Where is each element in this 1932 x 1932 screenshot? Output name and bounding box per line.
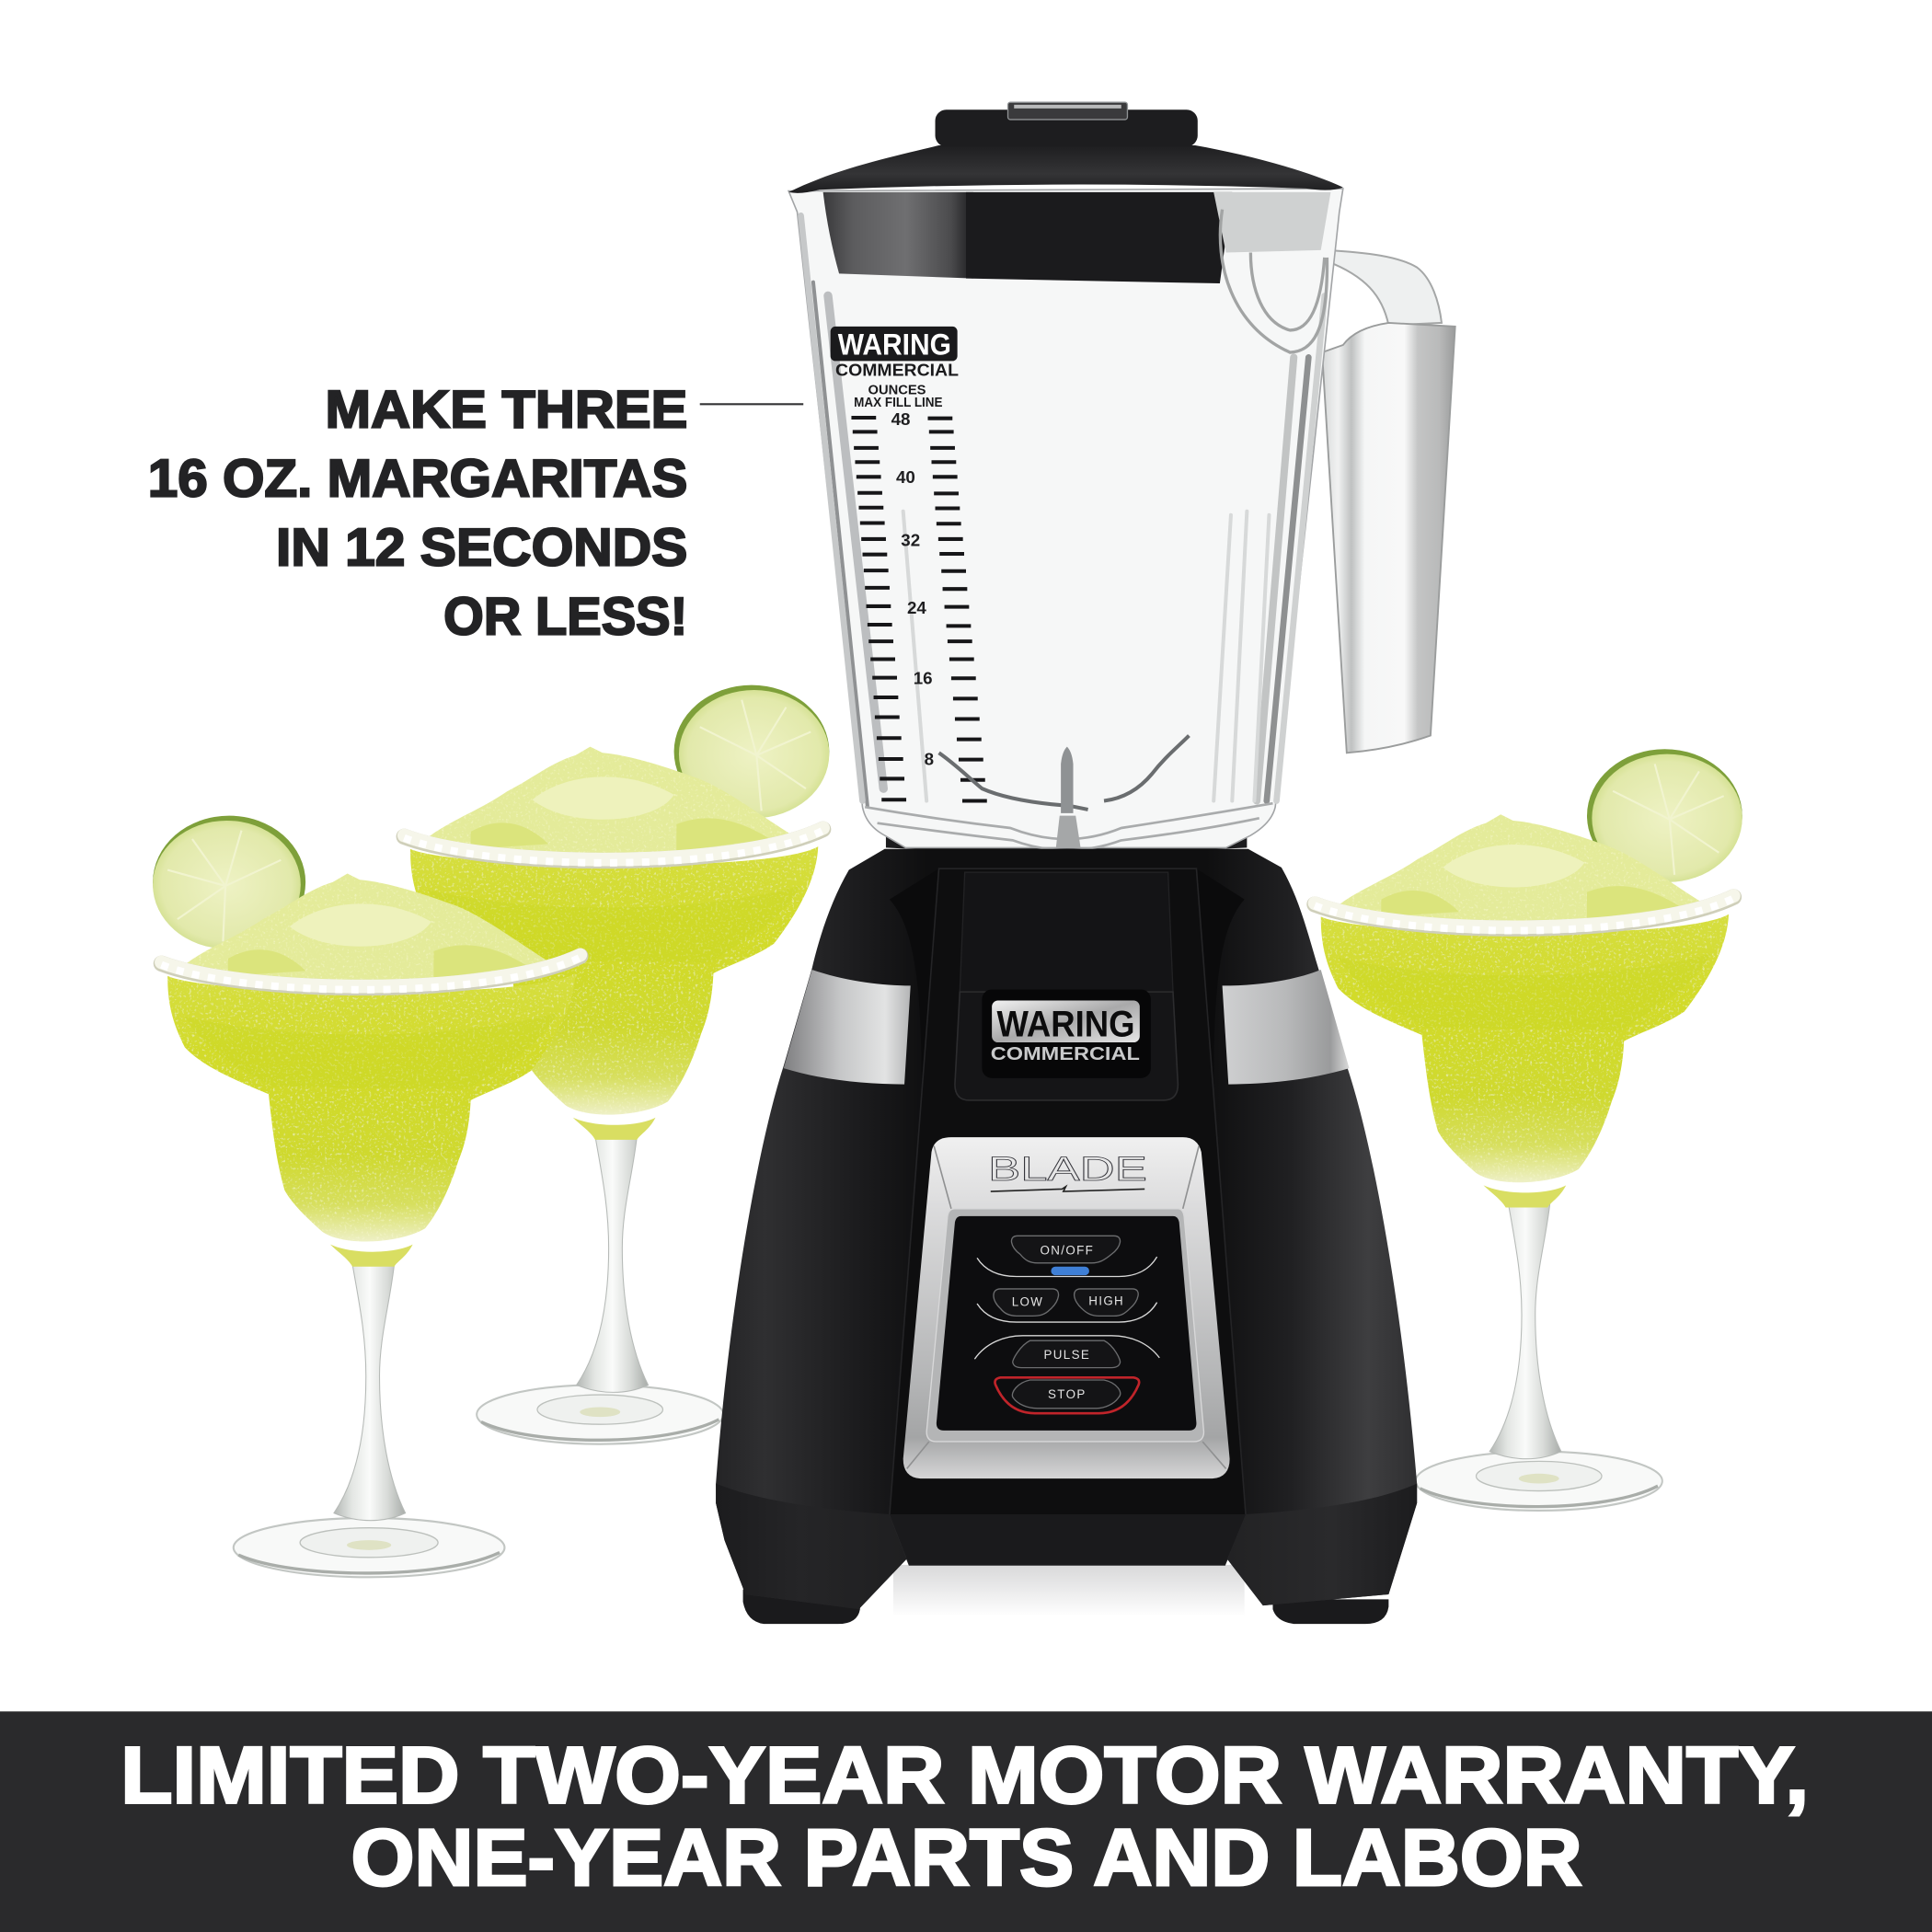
ounce numbers: 16 — [914, 668, 933, 687]
jar logo: WARING — [838, 328, 951, 362]
ounce numbers: 32 — [901, 530, 920, 549]
warranty banner — [0, 1711, 1932, 1932]
ounce numbers: 24 — [907, 598, 926, 617]
rubber feet — [743, 1590, 1388, 1624]
base lower band — [716, 1483, 1417, 1609]
shoulder shading — [890, 868, 1245, 1085]
blade — [939, 736, 1189, 847]
base logo plaque: WARING — [996, 1003, 1134, 1044]
right silver band — [1223, 970, 1350, 1085]
base logo plaque: COMMERCIAL — [991, 1043, 1140, 1064]
upper recess — [960, 872, 1173, 992]
jar logo: COMMERCIAL — [835, 360, 959, 379]
power LED — [1051, 1267, 1089, 1275]
button labels: HIGH — [1088, 1294, 1124, 1307]
button outlines — [994, 1236, 1138, 1409]
callout text: margaritas: IN 12 SECONDS — [276, 519, 687, 578]
callout text: margaritas — [148, 381, 687, 647]
button labels: STOP — [1048, 1387, 1087, 1401]
floor shadow — [893, 1565, 1245, 1616]
jar logo: MAX FILL LINE — [854, 396, 943, 410]
callout text: margaritas: OR LESS! — [443, 588, 687, 647]
callout text: margaritas: MAKE THREE — [326, 381, 687, 440]
margarita glass: front left — [153, 816, 581, 1577]
control panel — [903, 1137, 1230, 1478]
base logo plaque — [955, 989, 1178, 1100]
warranty banner: ONE-YEAR PARTS AND LABOR — [351, 1813, 1582, 1903]
ounce numbers — [891, 409, 934, 769]
ounce numbers: 40 — [896, 467, 915, 487]
callout leader line — [700, 403, 803, 405]
jar seat ring — [886, 833, 1247, 853]
warranty banner: LIMITED TWO-YEAR MOTOR WARRANTY, — [121, 1731, 1809, 1820]
stop red outline — [995, 1377, 1139, 1413]
blender base — [716, 849, 1417, 1624]
ounce numbers: 48 — [891, 409, 910, 429]
button labels — [1012, 1243, 1124, 1401]
jar logo: OUNCES — [868, 384, 926, 398]
jar dark collar — [823, 192, 1330, 283]
button labels: LOW — [1012, 1295, 1043, 1309]
button labels: ON/OFF — [1041, 1243, 1094, 1257]
button panel — [937, 1216, 1196, 1431]
jar lid — [788, 102, 1343, 193]
jar side ribs — [903, 512, 1269, 801]
margarita glass: right — [1315, 749, 1742, 1511]
jar glass edge strips — [801, 215, 1325, 806]
button labels: PULSE — [1044, 1348, 1090, 1362]
right measurement ticks — [927, 419, 987, 801]
margarita glass: back center — [404, 685, 829, 1444]
ounce numbers: 8 — [925, 750, 934, 769]
jar base wave — [865, 803, 1272, 850]
arcs — [974, 1257, 1159, 1359]
base silhouette — [716, 849, 1417, 1609]
left silver band — [784, 970, 911, 1085]
blade wordmark: BLADE — [988, 1149, 1147, 1188]
jar body — [788, 189, 1343, 847]
center column — [890, 868, 1246, 1565]
jar logo — [831, 327, 959, 410]
left measurement ticks — [851, 418, 906, 799]
jar spout — [1220, 210, 1327, 352]
blender jar — [788, 189, 1455, 853]
callout text: margaritas: 16 OZ. MARGARITAS — [148, 450, 687, 509]
jar handle — [1248, 247, 1455, 753]
